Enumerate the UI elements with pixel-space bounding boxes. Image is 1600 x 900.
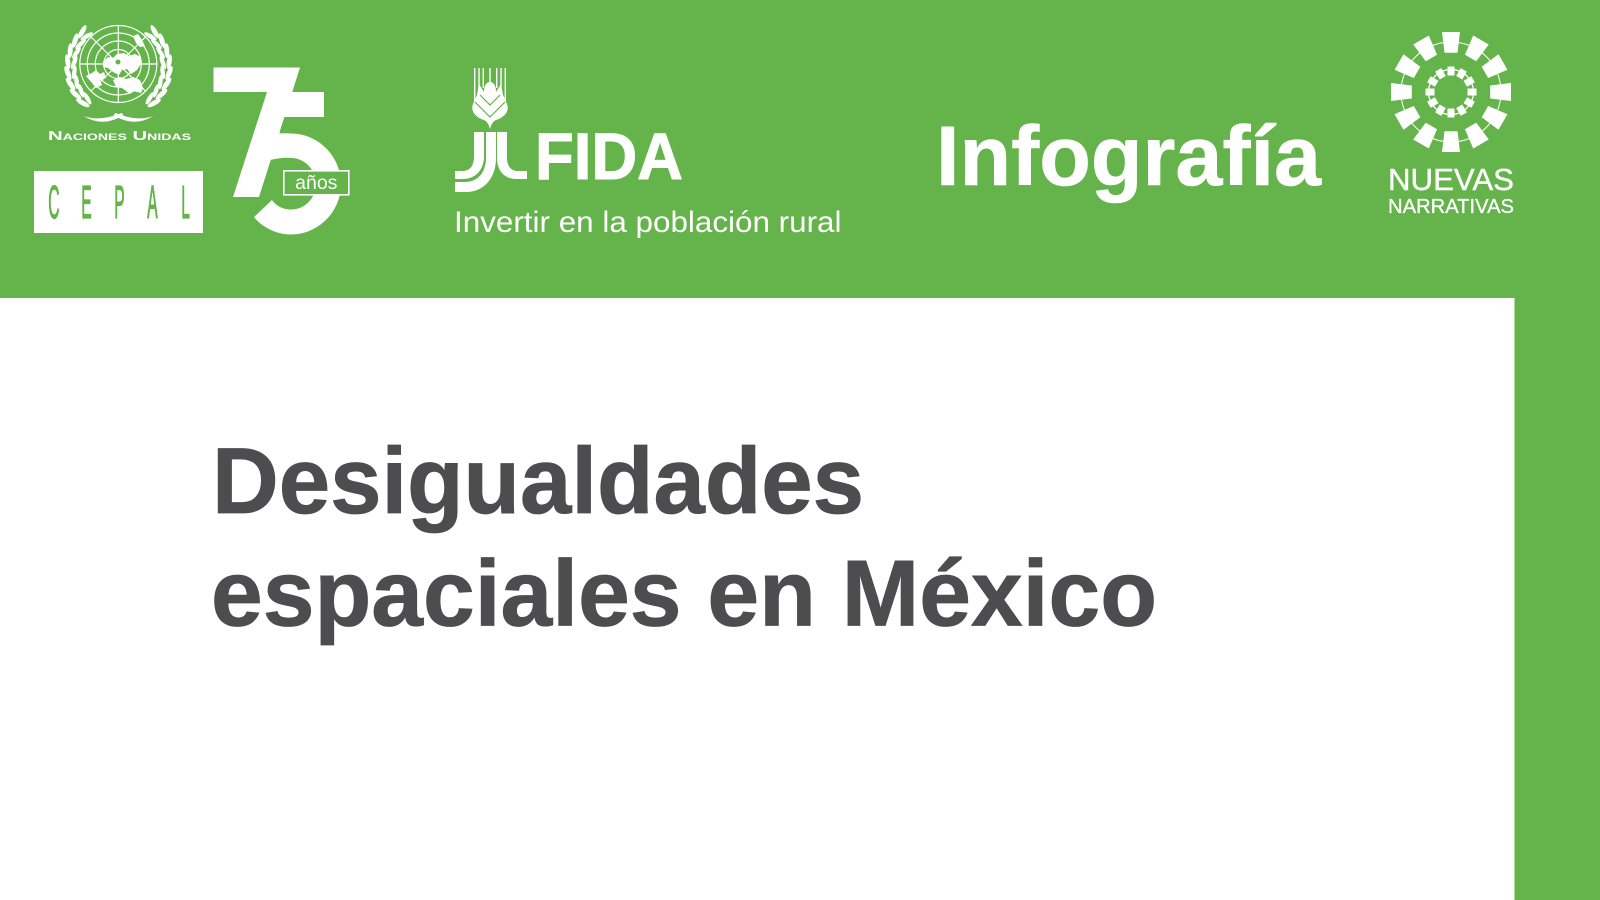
wheat ear icon bbox=[472, 68, 508, 129]
title bbox=[211, 428, 1157, 646]
numeral 7 bbox=[214, 68, 300, 197]
logo: United Nations emblem bbox=[63, 24, 174, 122]
logo: Nuevas Narrativas bbox=[1388, 32, 1514, 218]
left olive wreath bbox=[63, 24, 124, 122]
right olive wreath bbox=[114, 24, 174, 122]
continents bbox=[86, 34, 145, 94]
logo: FIDA bbox=[454, 68, 842, 239]
CEPAL wordmark: CEPAL bbox=[48, 178, 190, 229]
JJL mark bbox=[455, 132, 527, 192]
logo: CEPAL box bbox=[34, 171, 203, 233]
FIDA wordmark: FIDA bbox=[535, 119, 683, 193]
logo: 75 años bbox=[214, 68, 349, 234]
años label: años bbox=[295, 172, 338, 194]
heading: Infografía: Infografía bbox=[936, 109, 1322, 203]
FIDA tagline: Invertir en la población rural bbox=[454, 206, 842, 239]
title line 1: Desigualdades bbox=[212, 428, 864, 533]
title line 2: espaciales en México bbox=[211, 540, 1157, 646]
NARRATIVAS wordmark: NARRATIVAS bbox=[1388, 196, 1514, 218]
numeral 5 bbox=[254, 92, 341, 234]
wheel icon bbox=[1391, 32, 1511, 152]
NUEVAS wordmark: NUEVAS bbox=[1388, 162, 1514, 197]
label: Naciones Unidas: Naciones Unidas bbox=[48, 128, 191, 143]
globe grid bbox=[80, 26, 157, 102]
white content panel bbox=[0, 298, 1514, 900]
años tag bbox=[284, 171, 349, 195]
